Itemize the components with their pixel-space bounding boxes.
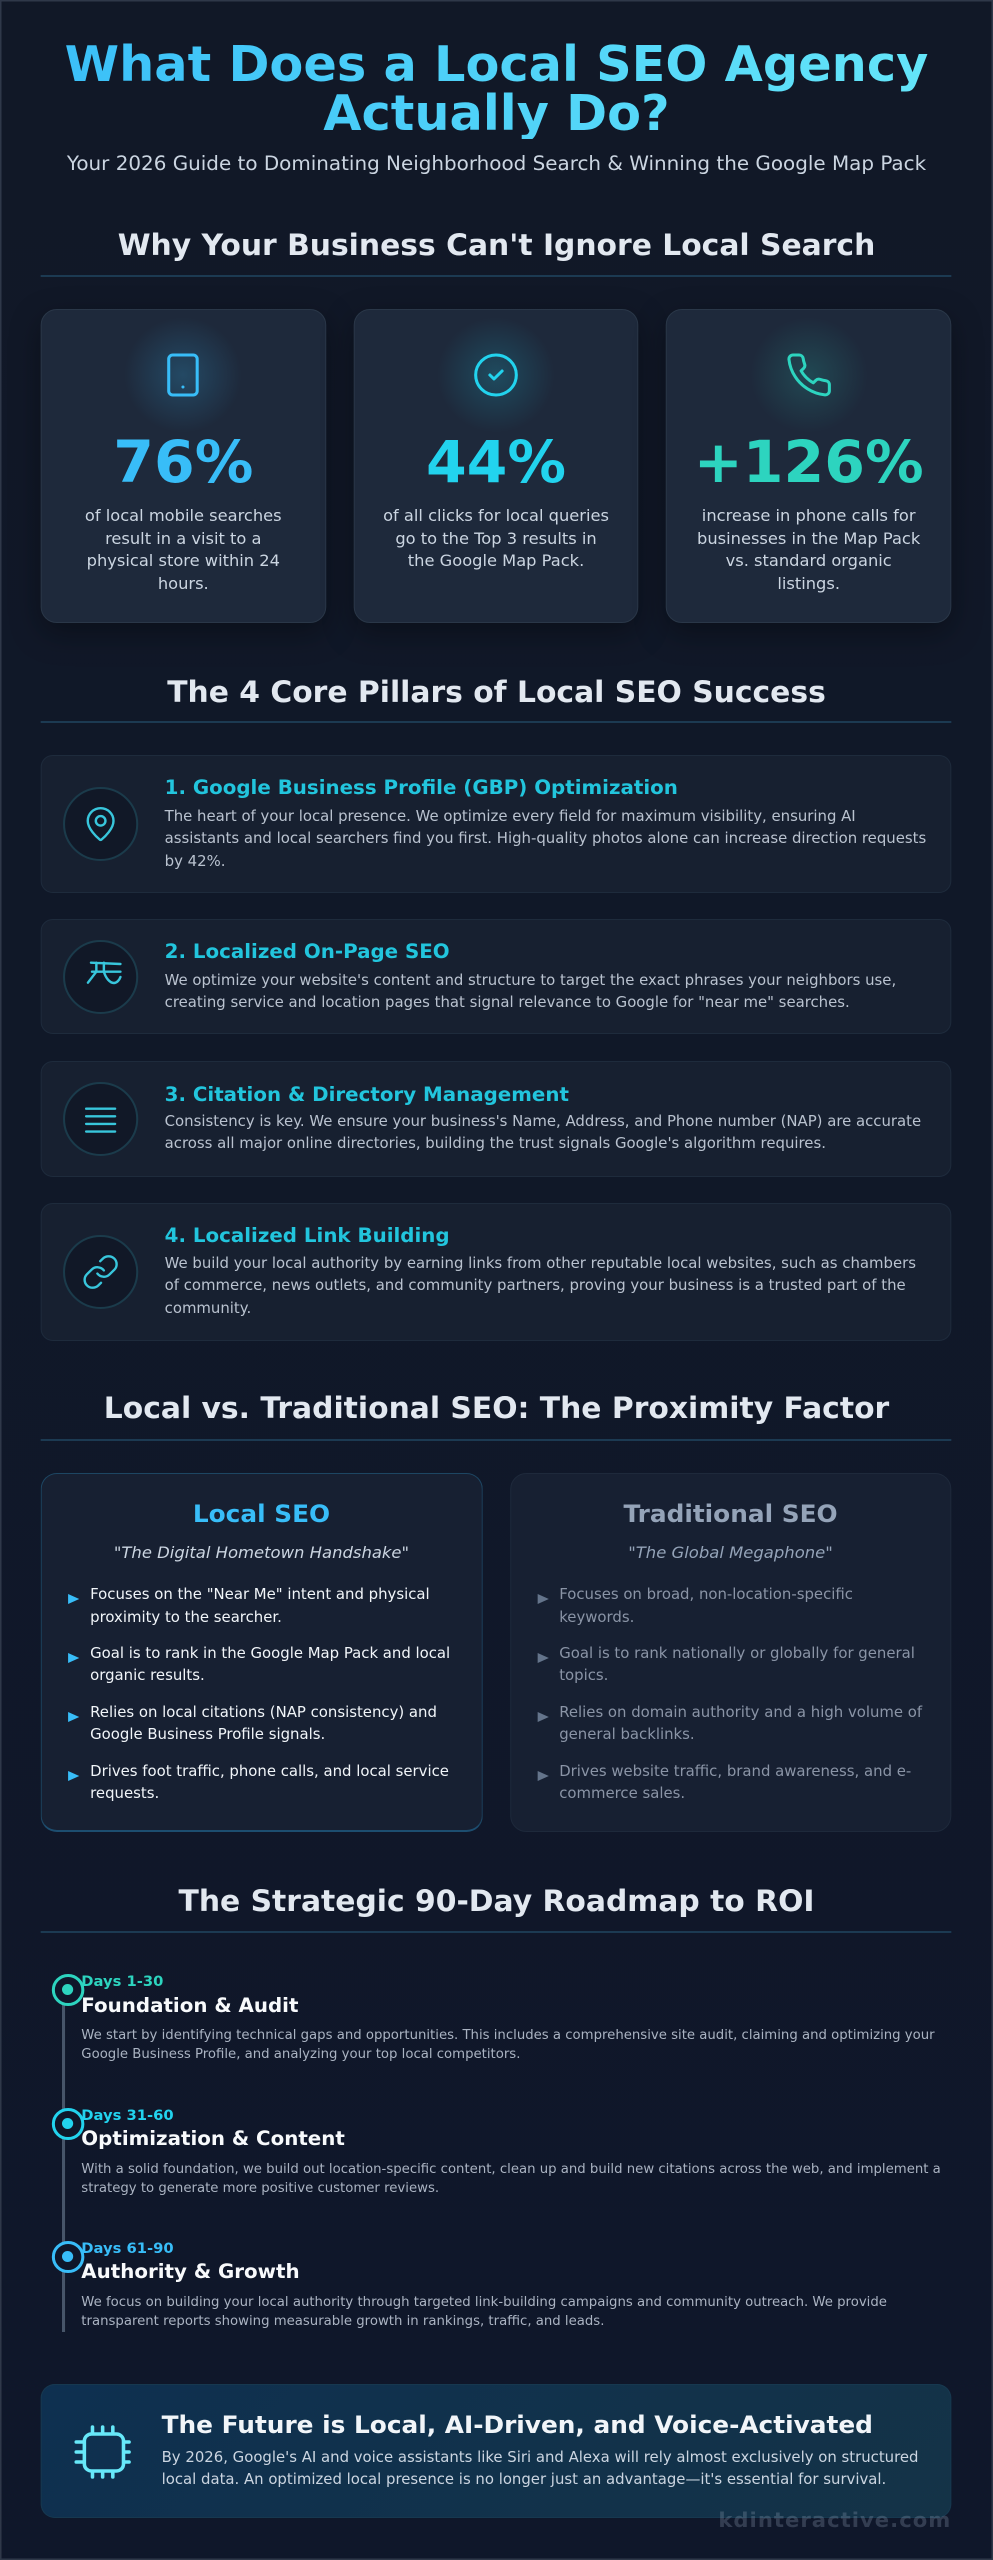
stat text: listings.: [777, 574, 840, 593]
roadmap step 2: Optimization & Content: [81, 2127, 345, 2150]
panel: local SEO: [41, 1473, 482, 1832]
icon: on-page symbol: [63, 940, 138, 1014]
panel: traditional SEO: general backlinks.: [559, 1726, 695, 1743]
icon: smartphone: [167, 354, 199, 396]
title: Actually Do?: [323, 86, 670, 142]
roadmap step 3: Authority & Growth: [81, 2260, 300, 2283]
list: traditional bullets: [538, 1586, 853, 1626]
callout text: local data. An optimized local presence is no longer just an advantage—it's essential for survival.: [162, 2471, 886, 2488]
callout text: By 2026, Google's AI and voice assistants like Siri and Alexa will rely almost exclusively on structured: [162, 2448, 919, 2466]
panel: traditional SEO: topics.: [559, 1667, 608, 1684]
column title: Traditional SEO: [623, 1499, 838, 1528]
panel: local SEO: Goal is to rank in the Google Map Pack and local: [90, 1644, 450, 1662]
panel: traditional SEO: Relies on domain authority and a high volume of: [559, 1704, 922, 1720]
timeline marker 3: [52, 2241, 84, 2273]
panel: traditional SEO: Drives website traffic, brand awareness, and e-: [559, 1762, 911, 1780]
stat text: the Google Map Pack.: [408, 551, 584, 570]
roadmap step 3: [81, 2241, 887, 2329]
icon: map pin: [63, 787, 138, 861]
column tagline: "The Global Megaphone": [628, 1543, 833, 1562]
timeline line: [62, 1995, 65, 2332]
list: local bullets: [68, 1586, 430, 1626]
stat text: [383, 506, 609, 570]
heading: pillars: The 4 Core Pillars of Local SEO Success: [167, 675, 826, 709]
icon: phone: [787, 354, 831, 396]
panel: traditional SEO: Goal is to rank nationally or globally for general: [559, 1644, 915, 1662]
icon: check circle: [474, 354, 518, 396]
roadmap step 2: strategy to generate more positive customer reviews.: [81, 2181, 439, 2196]
roadmap step 1: Foundation & Audit: [81, 1994, 298, 2017]
roadmap step 2: [81, 2108, 941, 2196]
list: traditional bullets: Focuses on broad, non-location-specific: [559, 1586, 853, 1603]
icon: link: [63, 1235, 138, 1309]
callout title: The Future is Local, AI-Driven, and Voice-Activated: [162, 2410, 873, 2439]
pillar text: across all major online directories, building the trust signals Google's algorithm requires.: [165, 1135, 826, 1152]
stat text: increase in phone calls for: [702, 506, 916, 525]
pillar text: assistants and local searchers find you first. High-quality photos alone can increase direction requests: [165, 830, 926, 847]
panel: stat 44%: [353, 309, 639, 623]
stat number: 44%: [426, 429, 566, 496]
pillar text: We build your local authority by earning links from other reputable local websites, such as chambers: [165, 1254, 916, 1272]
pillar title: 3. Citation & Directory Management: [165, 1083, 569, 1106]
heading: why local search: Why Your Business Can't Ignore Local Search: [118, 228, 875, 262]
roadmap step 1: Google Business Profile, and analyzing your top local competitors.: [81, 2047, 520, 2062]
panel: pillar 1: [41, 755, 951, 893]
column tagline: "The Digital Hometown Handshake": [114, 1543, 409, 1562]
panel: stat +126%: [666, 309, 951, 623]
roadmap step 1: Days 1-30: [81, 1974, 163, 1990]
roadmap step 3: transparent reports showing measurable growth in rankings, traffic, and leads.: [81, 2314, 604, 2329]
panel: traditional SEO: commerce sales.: [559, 1785, 685, 1802]
stat text: vs. standard organic: [726, 551, 892, 570]
timeline marker 2: [52, 2108, 84, 2140]
column title: Local SEO: [193, 1499, 330, 1528]
panel: local SEO: organic results.: [90, 1667, 205, 1684]
subtitle: Your 2026 Guide to Dominating Neighborhood Search & Winning the Google Map Pack: [67, 152, 926, 175]
title: What Does a Local SEO Agency: [65, 37, 928, 93]
stat text: of local mobile searches: [85, 506, 282, 525]
stat number: 76%: [113, 429, 253, 496]
pillar text: of commerce, news outlets, and community partners, proving your business is a trusted part of the: [165, 1277, 906, 1294]
title: [0, 41, 993, 139]
pillar text: Consistency is key. We ensure your business's Name, Address, and Phone number (NAP) are accurate: [165, 1112, 921, 1130]
pillar text: The heart of your local presence. We optimize every field for maximum visibility, ensuring AI: [165, 808, 856, 824]
icon: chip: [74, 2425, 131, 2479]
roadmap step 3: Days 61-90: [81, 2241, 174, 2257]
stat text: businesses in the Map Pack: [697, 529, 920, 548]
stat text: result in a visit to a: [105, 529, 262, 548]
panel: pillar 2: [41, 919, 951, 1034]
stat number: +126%: [694, 429, 924, 496]
pillar text: community.: [165, 1300, 251, 1317]
pillar text: [165, 972, 896, 1011]
pillar text: [165, 1112, 921, 1152]
pillar text: by 42%.: [165, 853, 225, 870]
heading: comparison: Local vs. Traditional SEO: The Proximity Factor: [104, 1391, 889, 1425]
list: local bullets: Focuses on the "Near Me" intent and physical: [90, 1586, 430, 1603]
pillar title: 4. Localized Link Building: [165, 1224, 450, 1247]
panel: pillar 3: [41, 1061, 951, 1177]
pillar title: 1. Google Business Profile (GBP) Optimization: [165, 776, 678, 799]
pillar text: creating service and location pages that signal relevance to Google for "near me" searches.: [165, 994, 850, 1011]
stat text: hours.: [158, 574, 209, 593]
roadmap step 2: Days 31-60: [81, 2108, 174, 2124]
panel: pillar 4: [41, 1203, 951, 1341]
callout text: [162, 2448, 919, 2488]
stat text: go to the Top 3 results in: [395, 529, 597, 548]
panel: stat 76%: [41, 309, 326, 623]
panel: local SEO: Relies on local citations (NAP consistency) and: [90, 1704, 437, 1720]
heading: roadmap: The Strategic 90-Day Roadmap to ROI: [179, 1884, 814, 1918]
stat text: [85, 506, 282, 593]
roadmap step 3: We focus on building your local authority through targeted link-building campaigns and community outreach. We provide: [81, 2295, 887, 2310]
list: traditional bullets: keywords.: [559, 1609, 634, 1626]
stat text: of all clicks for local queries: [383, 506, 609, 525]
panel: local SEO: requests.: [90, 1785, 159, 1802]
list: local bullets: proximity to the searcher.: [90, 1609, 282, 1626]
pillar text: [164, 808, 926, 870]
stat text: physical store within 24: [87, 551, 280, 570]
roadmap step 2: With a solid foundation, we build out location-specific content, clean up and build new citations across the web, and implement a: [81, 2162, 941, 2177]
panel: local SEO: Google Business Profile signals.: [90, 1726, 325, 1743]
icon: list lines: [63, 1082, 138, 1156]
panel: future callout: [41, 2384, 951, 2518]
timeline marker 1: [52, 1974, 84, 2006]
watermark: kdinteractive.com: [718, 2508, 951, 2532]
roadmap step 1: [81, 1974, 935, 2062]
panel: local SEO: Drives foot traffic, phone calls, and local service: [90, 1762, 449, 1780]
pillar text: We optimize your website's content and structure to target the exact phrases your neighbors use,: [165, 972, 896, 988]
roadmap step 1: We start by identifying technical gaps and opportunities. This includes a comprehensive site audit, claiming and optimizing your: [81, 2028, 935, 2043]
pillar text: [165, 1254, 916, 1317]
pillar title: 2. Localized On-Page SEO: [165, 940, 450, 963]
stat text: [697, 506, 920, 593]
panel: traditional SEO: [510, 1473, 951, 1832]
